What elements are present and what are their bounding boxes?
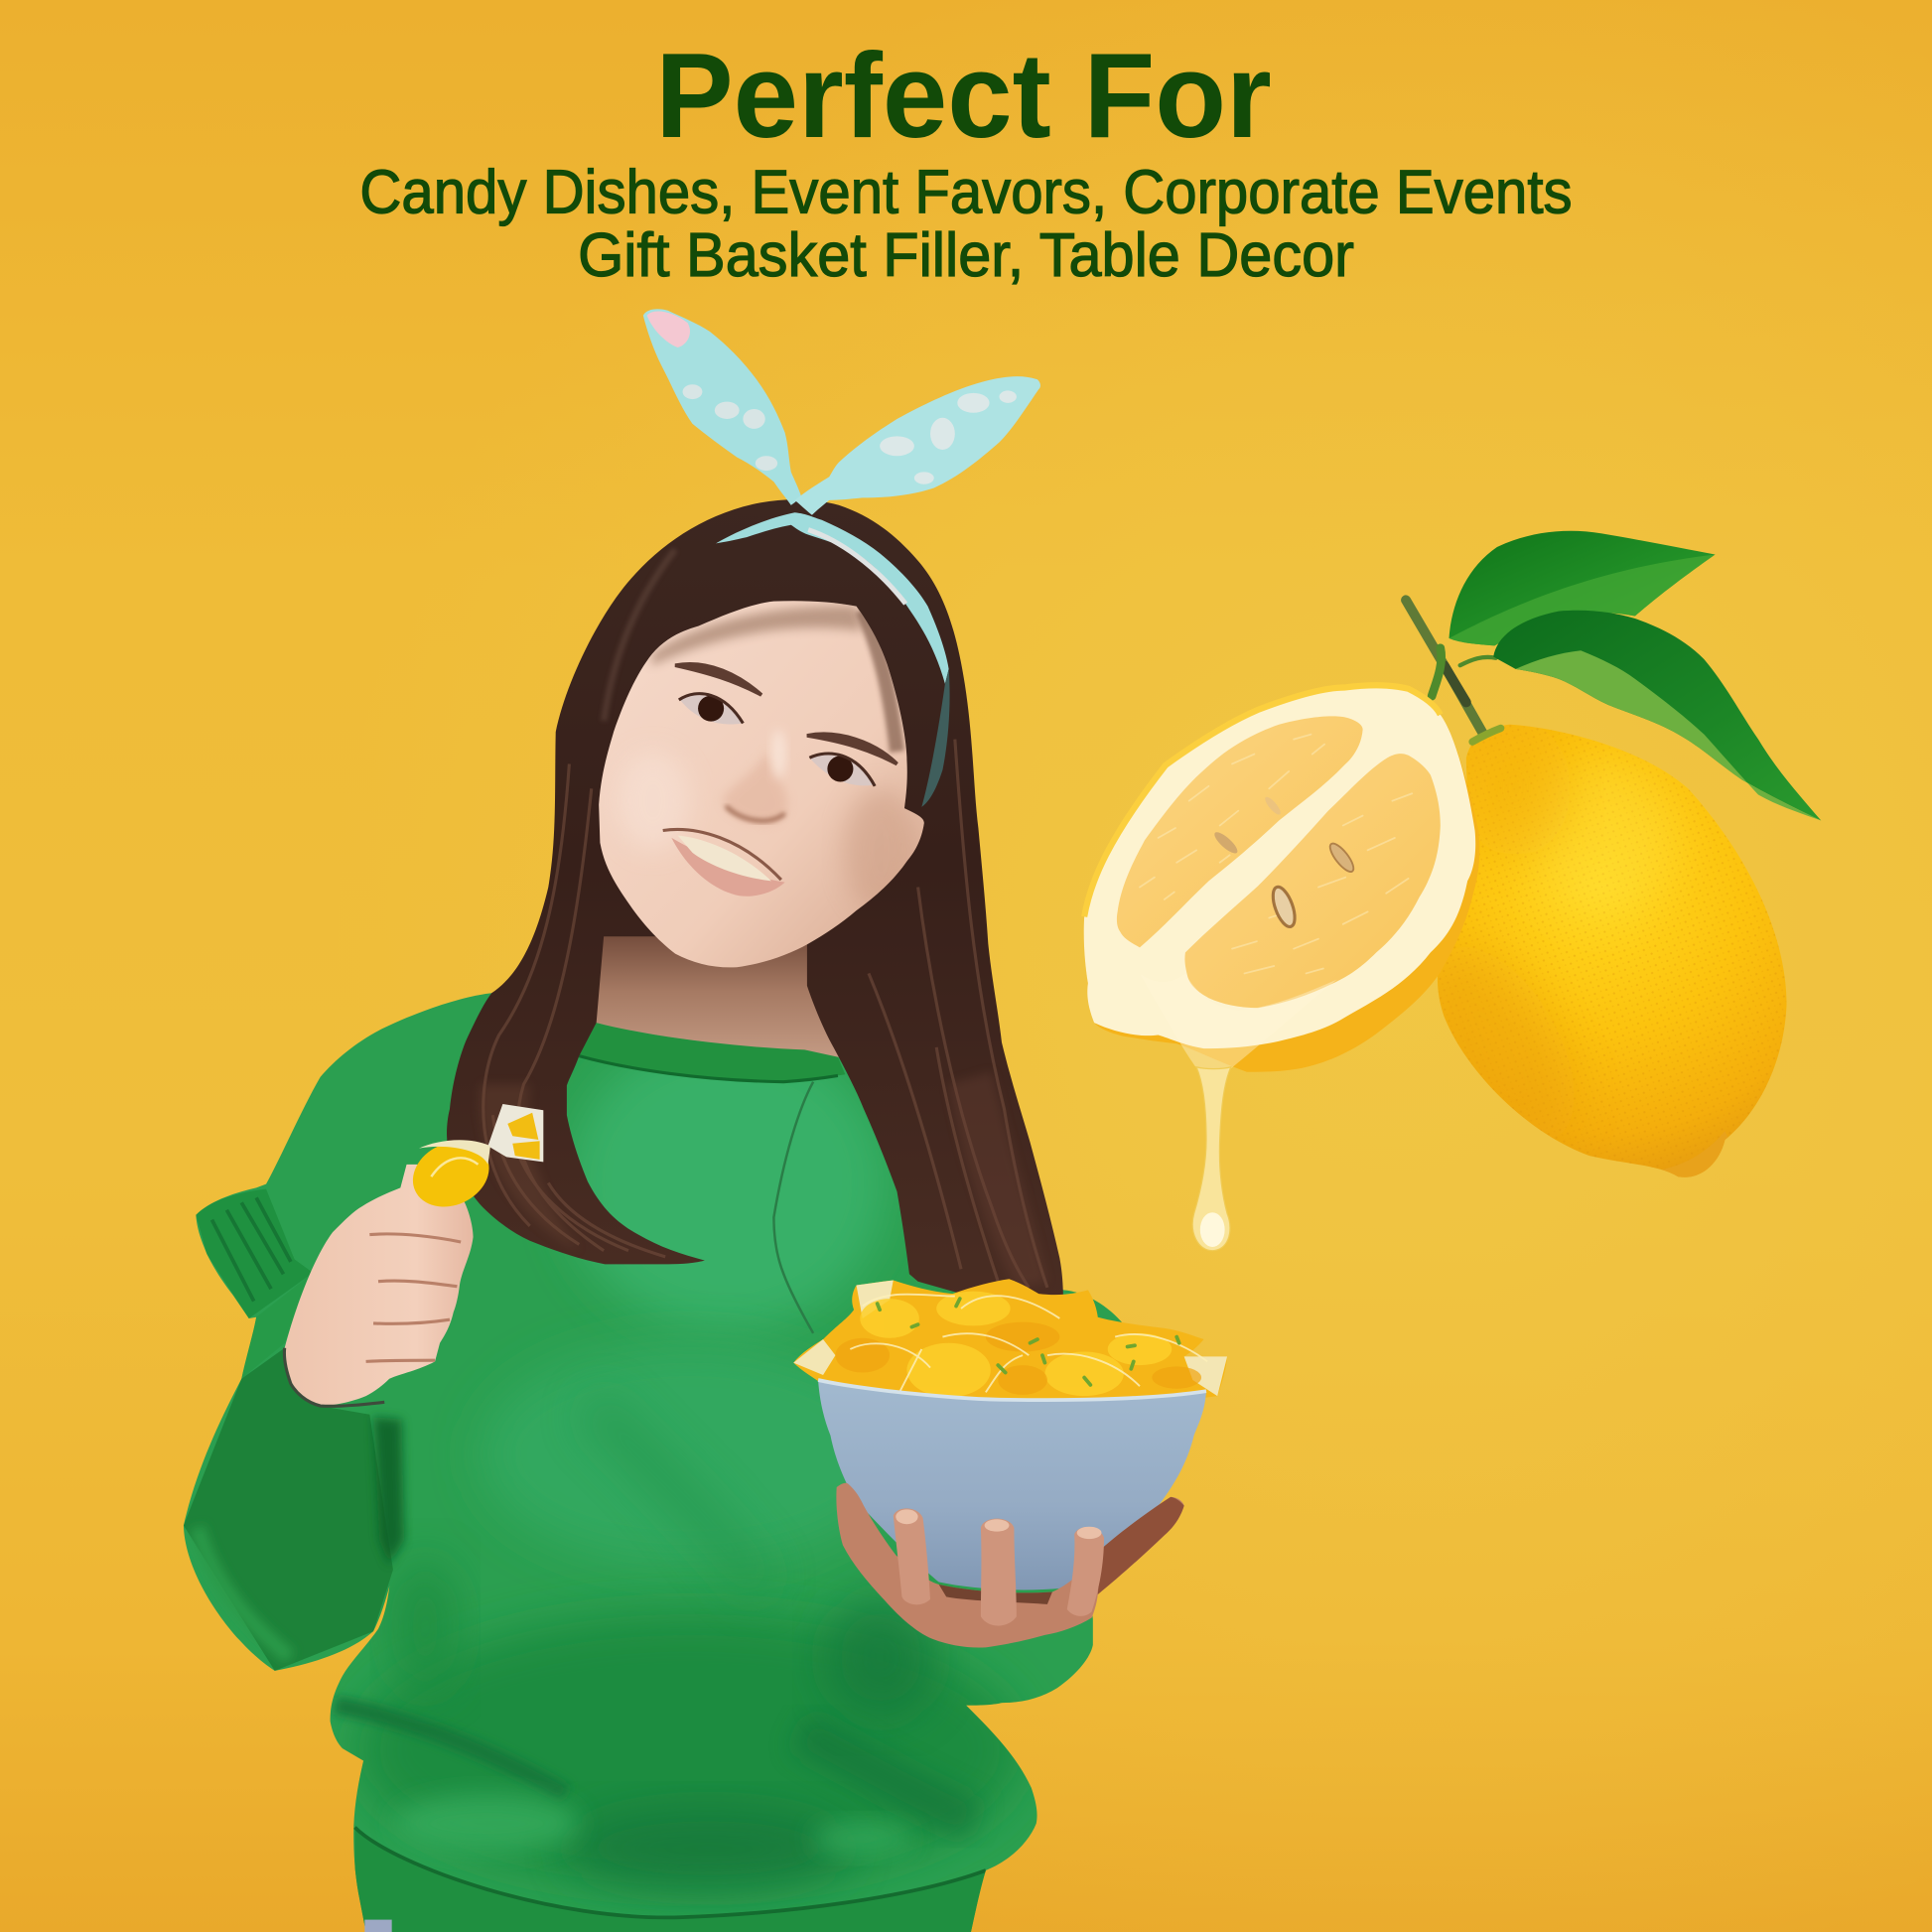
hair: [447, 499, 1063, 1333]
lower segment: [1184, 754, 1441, 1008]
hem: [354, 1828, 986, 1932]
ruffle shade: [196, 1189, 313, 1318]
finger two: [981, 1519, 1017, 1626]
collar: [579, 1023, 845, 1082]
finger three: [1067, 1527, 1104, 1616]
eyebrows: [675, 664, 761, 695]
face: [599, 601, 924, 967]
hand under bowl: [836, 1483, 1184, 1648]
upper segment: [1117, 716, 1363, 947]
juice drip: [1192, 1067, 1231, 1251]
pants hint: [364, 1920, 392, 1932]
stem: [1406, 600, 1501, 742]
nose: [722, 730, 787, 823]
left hand holding candy: [284, 1165, 474, 1406]
subheading: Candy Dishes, Event Favors, Corporate Events: [359, 159, 1573, 227]
bunny ear: left: [643, 309, 801, 505]
single wrapped candy: [402, 1104, 543, 1219]
eyes: [679, 694, 875, 786]
juice film: [1140, 973, 1337, 1069]
illustration: girl with candy bowl: [184, 309, 1227, 1932]
flesh texture: [1140, 735, 1412, 973]
sweater: [184, 993, 1124, 1932]
cut lemon half: [1084, 685, 1479, 1072]
leaf: lower: [1493, 611, 1821, 821]
forearm sleeve shade: [184, 1348, 393, 1671]
heading: Perfect For: [655, 28, 1272, 163]
lower body shade: [357, 1614, 1023, 1885]
subheading: Gift Basket Filler, Table Decor: [578, 221, 1354, 290]
bowl: [818, 1380, 1206, 1589]
neck: [579, 924, 850, 1059]
cut face pith: [1084, 685, 1475, 1048]
lemon seeds: [1211, 795, 1357, 929]
leaf: upper: [1449, 531, 1716, 645]
subheading: [359, 159, 1573, 290]
bunny ear: right: [794, 376, 1040, 515]
chest highlight: [567, 1035, 888, 1330]
illustration: lemons with leaves: [1084, 531, 1821, 1251]
whole lemon: [1438, 725, 1787, 1177]
wrapper tips: [793, 1280, 1227, 1396]
finger one: [894, 1508, 930, 1604]
candy pile: [793, 1279, 1227, 1411]
smile: [663, 829, 785, 897]
headband: [643, 309, 1040, 807]
